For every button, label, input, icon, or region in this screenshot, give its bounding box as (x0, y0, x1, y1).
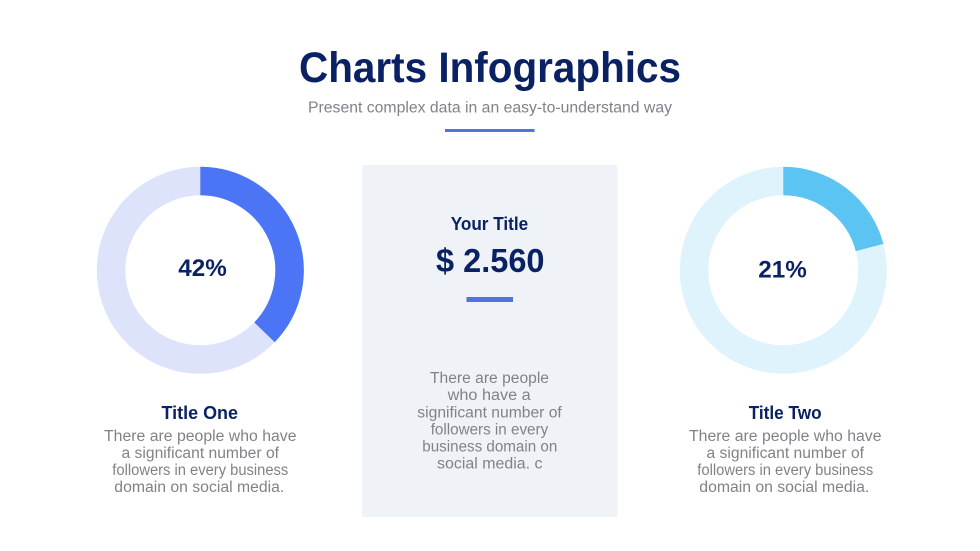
right text block (689, 403, 882, 496)
panel description: business domain on (422, 438, 557, 456)
donut chart: 21% (694, 181, 873, 360)
donut track (111, 181, 290, 360)
panel description: who have a (447, 387, 531, 404)
right description: a significant number of (706, 445, 865, 462)
right description: There are people who have (689, 428, 882, 445)
left description: followers in every business (112, 462, 289, 479)
panel background (362, 165, 618, 517)
left heading: Title One (162, 403, 238, 423)
panel amount: $ 2.560 (436, 242, 544, 279)
panel description: There are people (430, 370, 549, 387)
donut value arc (200, 181, 290, 332)
donut chart: 42% (111, 181, 290, 360)
right heading: Title Two (749, 403, 822, 423)
right description: followers in every business (697, 462, 874, 479)
donut value arc (783, 181, 870, 248)
panel heading: Your Title (451, 214, 528, 234)
donut value label: 42% (178, 255, 227, 282)
right description (689, 428, 882, 496)
left description (104, 428, 296, 496)
title underline (445, 129, 534, 132)
donut value label: 21% (758, 256, 807, 284)
panel description: significant number of (417, 404, 562, 421)
panel description (417, 370, 562, 472)
left description: a significant number of (122, 445, 280, 462)
subtitle: Present complex data in an easy-to-understand way (308, 100, 672, 116)
panel description: social media. c (437, 456, 543, 472)
donut track (694, 181, 873, 360)
panel description: followers in every (431, 422, 548, 438)
title: Charts Infographics (299, 44, 681, 92)
panel: center card (362, 165, 618, 517)
left description: There are people who have (104, 428, 296, 445)
right description: domain on social media. (699, 479, 869, 496)
left text block (104, 403, 296, 496)
left description: domain on social media. (114, 479, 284, 496)
panel accent bar (466, 297, 513, 302)
